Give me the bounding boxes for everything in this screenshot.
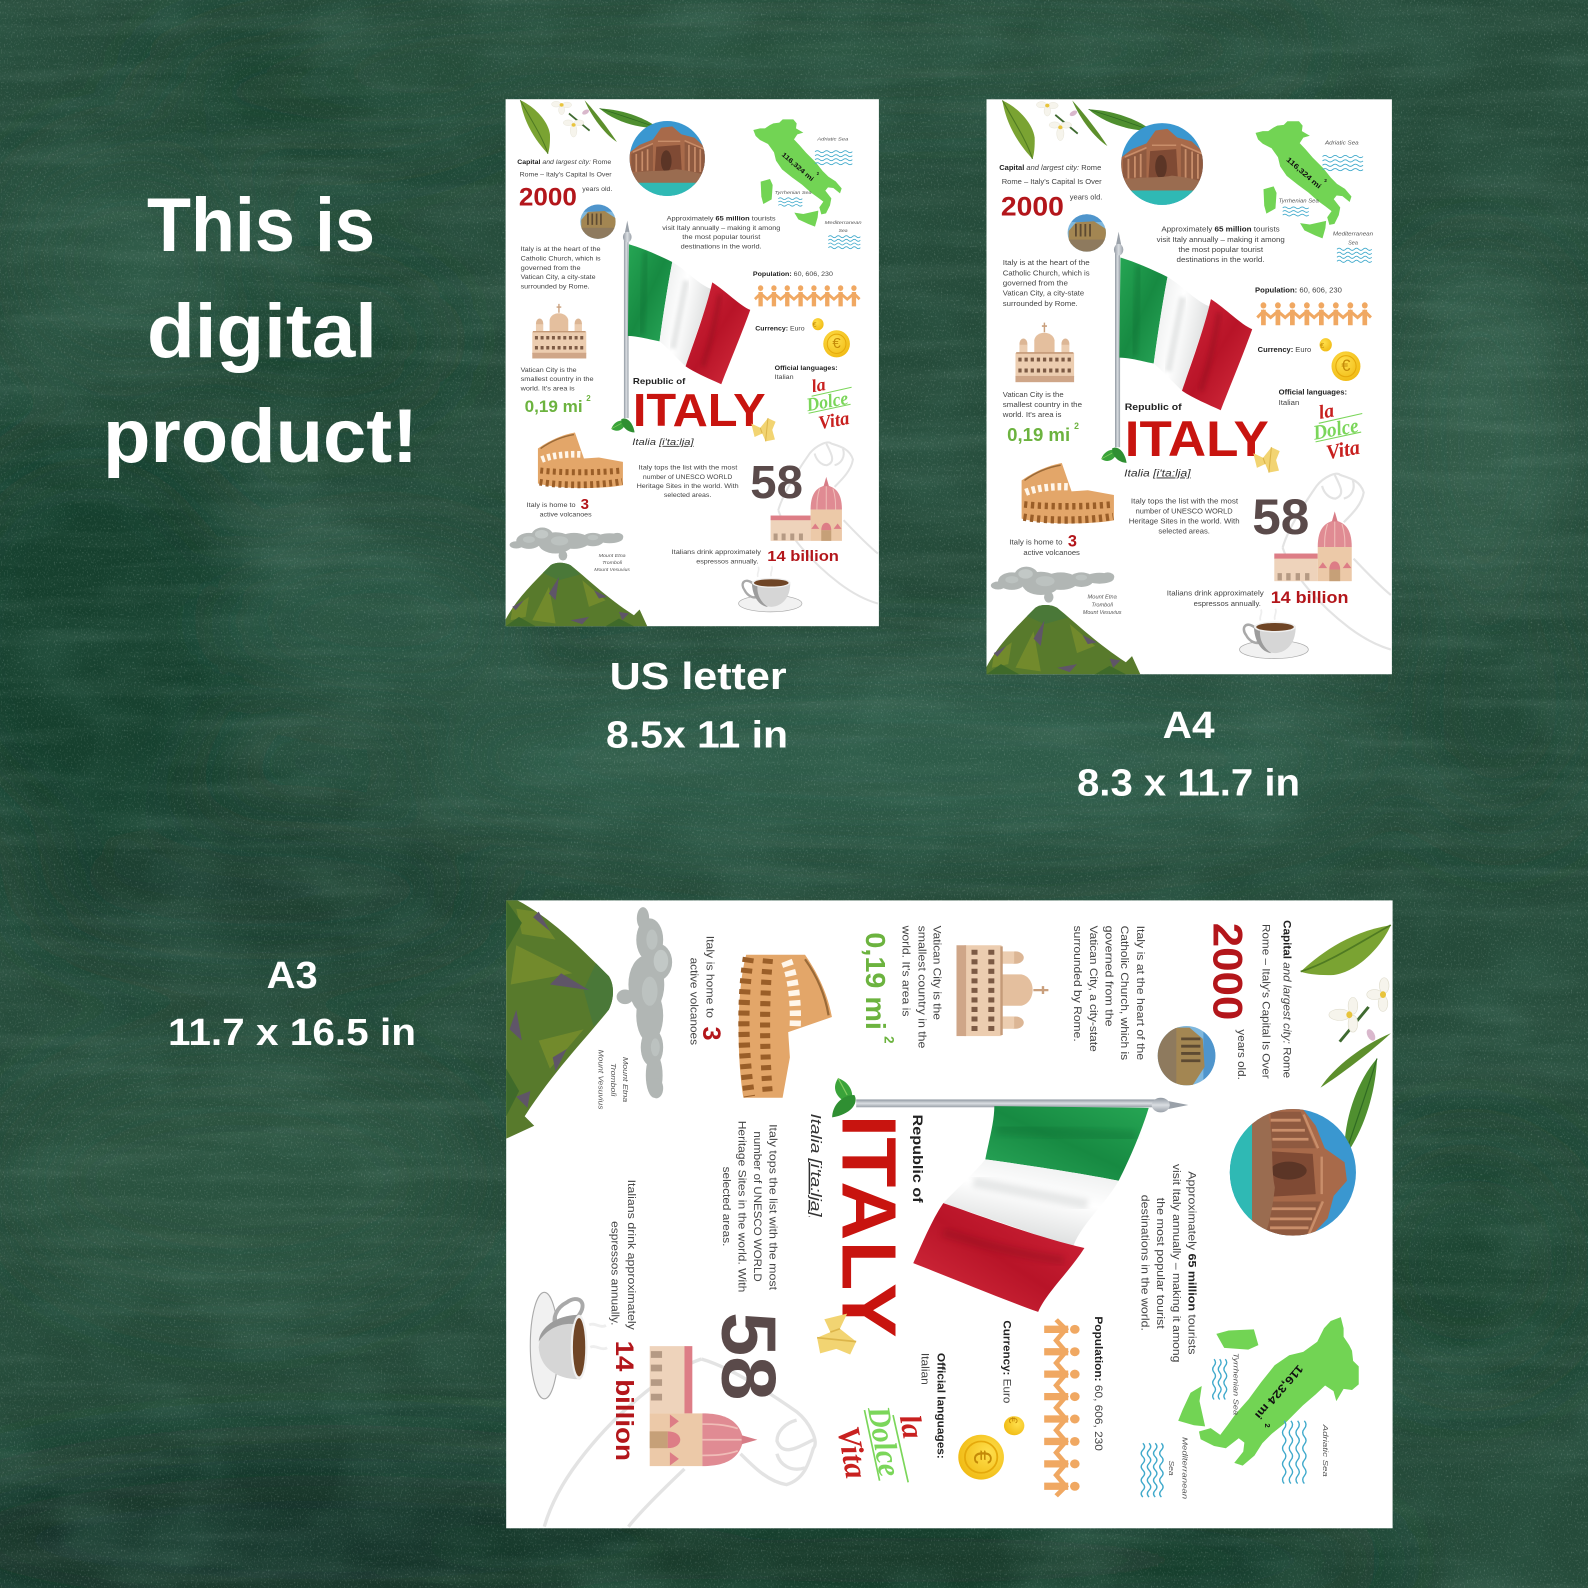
text: volcanoes: 3: [581, 496, 589, 513]
text: Catholic Church: Vatican City, a city-state: [521, 274, 596, 281]
icon: basil: [611, 418, 635, 432]
panel: A3 poster rotated: [506, 900, 1393, 1528]
title: Republic of Italy: Republic of: [1125, 402, 1182, 412]
icon: Italian flag: [628, 244, 750, 384]
map labels: Mediterranean: [825, 220, 862, 225]
text: volcano names: Mount Etna: [599, 553, 626, 558]
text: espresso: 14 billion: [1271, 589, 1348, 607]
text: Vatican City area: 0,19 mi: [860, 932, 891, 1030]
text: UNESCO: [1129, 498, 1240, 536]
text: tourists: destinations in the world.: [681, 244, 762, 250]
text: Catholic Church: governed from the: [1003, 281, 1068, 288]
text: capital: Rome – Italy's Capital Is Over: [520, 172, 612, 179]
map labels: Tyrrhenian Sea: [1279, 199, 1319, 205]
icon: Colosseum: [1022, 463, 1114, 524]
text: Catholic Church: [1071, 926, 1146, 1061]
icon: espresso cup: [1240, 609, 1308, 659]
text: espresso: espressos annually.: [609, 1221, 621, 1325]
map labels: Adriatic Sea: [816, 136, 849, 141]
text: volcano names: Mount Etna: [621, 1057, 630, 1103]
heading: this is digital product: product!: [103, 394, 418, 479]
text: UNESCO: Italy tops the list with the most: [767, 1124, 779, 1290]
text: volcanoes: [1009, 533, 1080, 557]
icon: smoke cloud: [617, 907, 672, 1098]
icon: Vatican basilica: [532, 304, 586, 358]
icon: row of people: [1257, 302, 1371, 325]
title: Republic of Italy: [807, 1114, 925, 1338]
text: Catholic Church: Italy is at the heart of the: [1134, 926, 1146, 1060]
text: Catholic Church: Catholic Church, which is: [1003, 270, 1090, 277]
text: volcano names: Mount Vesuvius: [597, 1050, 606, 1110]
map labels: Mediterranean: [1180, 1437, 1189, 1499]
text: espresso: [1167, 589, 1348, 608]
text: tourists: the most popular tourist: [1178, 247, 1263, 254]
icon: flagpole: [623, 221, 632, 418]
icon: leaves and flowers: [1301, 925, 1391, 1157]
icon: Vatican basilica: [956, 945, 1048, 1036]
text: volcano names: [597, 1050, 630, 1110]
text: Vatican City area: Vatican City is the: [1003, 392, 1064, 399]
caption: A3 size: 11.7 x 16.5 in: [168, 1012, 416, 1054]
text: UNESCO: selected areas.: [1158, 529, 1210, 536]
text: Catholic Church: surrounded by Rome.: [1003, 301, 1078, 308]
text: Vatican City area: [860, 925, 942, 1048]
text: Vatican City area: 2: [586, 394, 591, 403]
map labels: Sea: [1167, 1461, 1176, 1476]
icon: flagpole: [1114, 232, 1123, 447]
text: UNESCO: Italy tops the list with the most: [639, 465, 738, 472]
title: Republic of Italy: ITALY: [826, 1115, 912, 1338]
heading: this is digital product: This is: [147, 183, 375, 268]
icon: euro coins: €: [832, 335, 841, 352]
title: Republic of Italy: Republic of: [910, 1115, 925, 1203]
text: volcano names: Mount Etna: [1087, 595, 1117, 601]
text: official languages: [1279, 390, 1347, 407]
logo: la Dolce Vita: Vita: [817, 408, 851, 434]
text: Vatican City area: 0,19 mi: [525, 398, 583, 416]
photo: Roman forum: [1067, 213, 1107, 253]
text: espresso: Italians drink approximately: [1167, 590, 1264, 597]
text: Vatican City area: world. It's area is: [1002, 412, 1062, 419]
text: capital: Capital and largest city: Rome: [517, 159, 612, 166]
text: Vatican City area: world. It's area is: [519, 386, 575, 393]
text: official languages: Italian: [775, 374, 794, 381]
text: Vatican City area: [1002, 392, 1082, 445]
text: population: Population: 60, 606, 230: [1092, 1316, 1104, 1451]
map labels: Tyrrhenian Sea: [775, 190, 812, 195]
map labels: 2: [1324, 178, 1327, 184]
text: tourists: Approximately 65 million tourists: [1185, 1171, 1197, 1355]
icon: volcano: [506, 900, 613, 1139]
map labels: Sea: [839, 228, 848, 233]
icon: volcano: [506, 563, 647, 626]
text: volcano names: Mount Vesuvius: [594, 567, 631, 572]
icon: Colosseum: [739, 955, 832, 1098]
map labels: 2: [1263, 1424, 1272, 1428]
text: volcano names: [594, 553, 631, 572]
text: volcanoes: Italy is home to: [1009, 539, 1063, 546]
map labels: 116,324 mi: [1252, 1362, 1305, 1421]
icon: basil: [832, 1078, 856, 1117]
text: espresso: 14 billion: [767, 548, 839, 565]
icon: Italian flag: [1119, 257, 1252, 410]
text: Catholic Church: [1003, 260, 1090, 308]
text: volcanoes: active volcanoes: [687, 958, 699, 1046]
map labels: Adriatic Sea: [1324, 140, 1359, 146]
map labels: Sea: [1348, 240, 1358, 246]
text: capital: [1205, 920, 1292, 1080]
text: Catholic Church: surrounded by Rome.: [521, 284, 590, 290]
icon: Italian flag: [913, 1106, 1149, 1312]
icon: flagpole: [856, 1098, 1188, 1112]
icon: euro coins: €: [968, 1450, 996, 1464]
caption: A4 size: 8.3 x 11.7 in: [1077, 763, 1300, 805]
icon: euro coins: €: [813, 322, 817, 329]
caption: A3 size: A3: [267, 955, 318, 997]
text: official languages: Official languages:: [775, 365, 838, 372]
text: capital: Capital and largest city: Rome: [999, 165, 1101, 172]
logo: la Dolce Vita: Vita: [831, 1424, 874, 1481]
icon: Colosseum: [538, 433, 623, 488]
text: UNESCO: [720, 1121, 779, 1292]
text: Vatican City area: 2: [882, 1036, 897, 1044]
text: capital: 2000: [519, 184, 577, 212]
title: Republic of Italy: ITALY: [633, 384, 766, 436]
text: Catholic Church: Vatican City, a city-state: [1087, 926, 1099, 1052]
text: UNESCO: number of UNESCO WORLD: [751, 1131, 763, 1282]
panel: US letter poster: [506, 99, 879, 626]
map labels: [1279, 140, 1373, 246]
text: currency: Currency: Euro: [1000, 1320, 1012, 1403]
text: volcano names: Trombolì: [609, 1063, 618, 1097]
icon: Florence cathedral: [1274, 511, 1352, 581]
caption: A4 size: A4: [1163, 705, 1215, 747]
map of Italy: [1256, 121, 1372, 262]
text: official languages: Official languages:: [934, 1353, 946, 1459]
text: tourists: visit Italy annually – making it among: [1157, 237, 1285, 244]
text: volcanoes: 3: [1068, 533, 1077, 551]
text: capital: 2000: [1001, 190, 1064, 221]
icon: espresso cup: [739, 566, 802, 612]
text: Vatican City area: Vatican City is the: [521, 367, 577, 374]
caption: A3 size: [168, 955, 416, 1054]
text: UNESCO: selected areas.: [664, 492, 711, 499]
text: tourists: destinations in the world.: [1138, 1195, 1150, 1331]
text: capital: Rome – Italy's Capital Is Over: [1259, 924, 1271, 1079]
panel: A4 poster: [986, 99, 1392, 674]
heading: this is digital product: digital: [147, 289, 377, 374]
icon: smoke cloud: [991, 567, 1114, 603]
text: espresso: Italians drink approximately: [625, 1180, 637, 1330]
text: tourists: visit Italy annually – making it among: [1170, 1164, 1182, 1362]
icon: row of people: [1044, 1320, 1080, 1496]
text: tourists: the most popular tourist: [682, 234, 761, 241]
text: UNESCO: selected areas.: [720, 1167, 732, 1246]
text: UNESCO: Heritage Sites in the world. With: [637, 483, 739, 490]
photo: Trevi fountain: [628, 119, 706, 198]
text: espresso: espressos annually.: [696, 558, 759, 565]
text: volcano names: Mount Vesuvius: [1083, 610, 1122, 616]
icon: euro coins: [812, 318, 850, 357]
text: Vatican City area: [519, 367, 594, 416]
text: Catholic Church: Italy is at the heart of the: [521, 246, 601, 253]
text: volcanoes: [527, 496, 592, 519]
logo: la Dolce Vita: [1311, 400, 1362, 464]
text: capital: 2000: [1205, 923, 1252, 1020]
title: Republic of Italy: [1124, 402, 1269, 479]
icon: euro coins: [1320, 338, 1360, 381]
text: espresso: [609, 1180, 638, 1461]
map labels: Tyrrhenian Sea: [1231, 1353, 1240, 1416]
text: tourists: destinations in the world.: [1177, 257, 1265, 264]
icon: espresso cup: [530, 1292, 607, 1399]
text: volcanoes: [687, 936, 725, 1046]
icon: leaves and flowers: [1002, 100, 1152, 159]
icon: basil: [1101, 448, 1127, 463]
text: volcanoes: 3: [697, 1027, 725, 1041]
photo: Roman forum: [1155, 1025, 1217, 1087]
logo: la Dolce Vita: la: [810, 374, 827, 396]
logo: la Dolce Vita: [804, 374, 852, 434]
text: capital: years old.: [1235, 1029, 1247, 1080]
text: capital: [999, 165, 1102, 221]
map labels: 116,324 mi: [1285, 156, 1323, 191]
text: tourists: Approximately 65 million tourists: [1161, 227, 1280, 234]
logo: la Dolce Vita: [831, 1403, 930, 1482]
logo: la Dolce Vita: la: [893, 1412, 930, 1441]
icon: smoke cloud: [510, 528, 623, 561]
text: volcanoes: Italy is home to: [527, 502, 576, 509]
text: Vatican City area: smallest country in the: [521, 376, 594, 383]
text: Catholic Church: governed from the: [1102, 926, 1114, 1027]
logo: la Dolce Vita: Dolce: [1311, 415, 1360, 445]
text: Catholic Church: Italy is at the heart of the: [1003, 260, 1090, 267]
icon: hand gesture: [544, 1359, 815, 1527]
text: UNESCO: Heritage Sites in the world. With: [1129, 519, 1240, 526]
text: Catholic Church: [521, 246, 601, 290]
text: Vatican City area: world. It's area is: [899, 925, 911, 1017]
map labels: [1167, 1353, 1330, 1499]
title: Republic of Italy: Italia [i'ta:lja]: [632, 437, 694, 447]
caption: US letter size: US letter: [610, 656, 787, 698]
text: UNESCO: Heritage Sites in the world. With: [735, 1121, 747, 1292]
text: capital: [517, 159, 612, 212]
text: UNESCO: Italy tops the list with the most: [1131, 498, 1238, 505]
text: official languages: Official languages:: [1279, 390, 1347, 397]
icon: euro coins: [958, 1416, 1024, 1480]
logo: la Dolce Vita: Dolce: [804, 388, 850, 416]
icon: farfalle pasta: [817, 1314, 856, 1355]
photo: Roman forum: [580, 204, 616, 240]
map of Italy: [753, 119, 860, 249]
heading: this is digital product: [103, 183, 418, 479]
text: volcanoes: active volcanoes: [540, 512, 592, 519]
text: population: Population: 60, 606, 230: [753, 271, 833, 278]
text: Catholic Church: Vatican City, a city-state: [1003, 291, 1084, 298]
text: Vatican City area: smallest country in the: [915, 926, 927, 1048]
caption: US letter size: [606, 656, 788, 757]
text: volcano names: Trombolì: [602, 560, 623, 565]
map labels: Mediterranean: [1333, 232, 1373, 238]
text: Catholic Church: Catholic Church, which is: [1118, 926, 1130, 1061]
text: UNESCO: number of UNESCO WORLD: [1136, 508, 1233, 515]
icon: euro coins: €: [1341, 357, 1350, 375]
text: espresso: 14 billion: [610, 1341, 638, 1461]
text: official languages: [775, 365, 838, 381]
text: volcano names: Trombolì: [1092, 602, 1114, 608]
text: espresso: espressos annually.: [1194, 601, 1261, 608]
caption: A4 size: [1077, 705, 1300, 805]
text: tourists: [662, 216, 781, 250]
text: Catholic Church: governed from the: [521, 265, 581, 272]
icon: hand gesture: [778, 442, 878, 604]
logo: la Dolce Vita: Vita: [1325, 437, 1362, 464]
icon: volcano: [986, 605, 1140, 674]
text: capital: Rome – Italy's Capital Is Over: [1002, 179, 1102, 186]
text: currency: Currency: Euro: [755, 326, 805, 333]
text: official languages: Italian: [919, 1353, 931, 1385]
title: Republic of Italy: Republic of: [633, 377, 686, 386]
icon: euro coins: €: [1006, 1417, 1019, 1424]
title: Republic of Italy: Italia [i'ta:lja]: [807, 1114, 824, 1218]
logo: la Dolce Vita: Dolce: [861, 1403, 908, 1479]
map labels: [775, 136, 862, 233]
text: tourists: visit Italy annually – making it among: [662, 225, 781, 232]
text: Vatican City area: smallest country in the: [1003, 402, 1082, 409]
stat: 58: 58: [1252, 489, 1309, 545]
text: tourists: [1157, 227, 1285, 264]
text: Catholic Church: surrounded by Rome.: [1071, 926, 1083, 1042]
text: Vatican City area: 2: [1074, 421, 1079, 431]
icon: leaves and flowers: [520, 100, 658, 154]
text: official languages: Italian: [1279, 400, 1299, 407]
text: population: Population: 60, 606, 230: [1255, 287, 1342, 294]
text: capital: Capital and largest city: Rome: [1280, 920, 1292, 1078]
photo: Trevi fountain: [1119, 121, 1204, 207]
title: Republic of Italy: ITALY: [1125, 411, 1269, 467]
text: espresso: [672, 548, 839, 566]
logo: la Dolce Vita: la: [1317, 400, 1336, 424]
text: official languages: [919, 1353, 946, 1459]
icon: Vatican basilica: [1015, 323, 1074, 382]
icon: euro coins: €: [1320, 341, 1325, 350]
text: volcanoes: active volcanoes: [1023, 550, 1080, 557]
title: Republic of Italy: Italia [i'ta:lja]: [1124, 468, 1191, 479]
text: tourists: the most popular tourist: [1154, 1198, 1166, 1329]
map labels: 2: [817, 171, 820, 176]
text: capital: years old.: [1070, 195, 1102, 202]
icon: Florence cathedral: [771, 477, 842, 541]
icon: Florence cathedral: [650, 1346, 757, 1466]
map labels: 116,324 mi: [780, 151, 815, 183]
text: volcanoes: Italy is home to: [703, 936, 715, 1018]
icon: row of people: [755, 285, 860, 306]
text: tourists: Approximately 65 million tourists: [667, 216, 776, 223]
icon: farfalle pasta: [751, 418, 776, 441]
stat: 58: 58: [750, 456, 803, 508]
text: espresso: Italians drink approximately: [672, 549, 762, 556]
text: volcano names: [1083, 595, 1122, 616]
text: Vatican City area: 0,19 mi: [1007, 425, 1070, 445]
text: tourists: [1138, 1164, 1197, 1362]
text: currency: Currency: Euro: [1258, 347, 1311, 354]
text: Vatican City area: Vatican City is the: [930, 926, 942, 1020]
text: UNESCO: number of UNESCO WORLD: [643, 474, 733, 481]
icon: farfalle pasta: [1253, 447, 1280, 473]
map of Italy: [1141, 1317, 1359, 1497]
icon: hand gesture: [1283, 474, 1391, 650]
caption: US letter size: 8.5x 11 in: [606, 715, 788, 757]
photo: Trevi fountain: [1227, 1106, 1359, 1238]
text: UNESCO: [637, 465, 739, 499]
text: Catholic Church: Catholic Church, which is: [521, 256, 601, 263]
map labels: Adriatic Sea: [1321, 1423, 1330, 1478]
stat: 58: 58: [705, 1312, 791, 1400]
text: capital: years old.: [582, 186, 612, 193]
